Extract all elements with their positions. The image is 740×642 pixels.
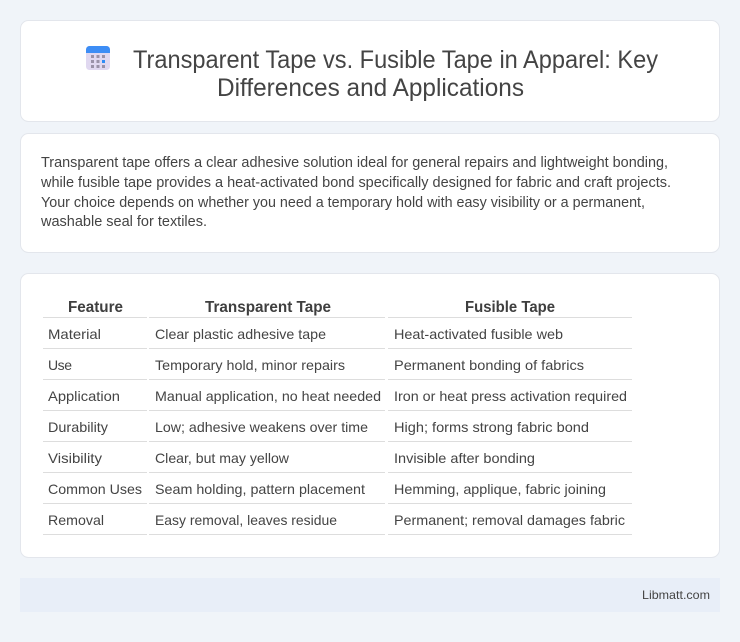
icon: calendar	[86, 46, 110, 70]
row: Use: Permanent bonding of fabrics	[394, 357, 584, 373]
row: Removal: Easy removal, leaves residue	[155, 512, 337, 528]
row: Use: Use	[48, 357, 72, 373]
row: Visibility	[43, 450, 632, 472]
text block: description	[40, 155, 671, 230]
table header: Transparent Tape	[205, 299, 331, 316]
heading: Differences and Applications	[217, 74, 524, 102]
row: Common Uses: Hemming, applique, fabric joining	[394, 481, 606, 497]
row: Material: Material	[48, 326, 101, 342]
row: Common Uses	[43, 481, 632, 504]
row: Application: Iron or heat press activation required	[394, 388, 627, 404]
row: Visibility: Invisible after bonding	[394, 450, 535, 466]
row: Use: Temporary hold, minor repairs	[155, 357, 345, 373]
row: Material: Heat-activated fusible web	[394, 326, 563, 342]
row: Common Uses: Seam holding, pattern placement	[155, 481, 365, 497]
row: Application: Manual application, no heat needed	[155, 388, 381, 404]
row: Durability: Durability	[48, 419, 108, 435]
row: Visibility: Visibility	[48, 450, 102, 466]
table header: Feature	[68, 299, 123, 316]
row: Removal: Permanent; removal damages fabric	[394, 512, 625, 528]
panel: title card	[20, 20, 720, 122]
table header	[43, 299, 632, 318]
footer: Libmatt.com	[642, 588, 710, 602]
row: Visibility: Clear, but may yellow	[155, 450, 290, 466]
footer	[20, 578, 720, 612]
heading: Transparent Tape vs. Fusible Tape in Apparel: Key	[133, 46, 658, 74]
row: Removal	[43, 512, 632, 534]
text block: description: Transparent tape offers a clear adhesive solution ideal for general repairs and lightweight bonding,	[41, 155, 668, 171]
row: Durability	[43, 419, 632, 442]
row: Durability: Low; adhesive weakens over time	[155, 419, 368, 435]
table header: Fusible Tape	[465, 299, 555, 316]
heading	[133, 46, 658, 102]
row: Use	[43, 357, 632, 380]
row: Durability: High; forms strong fabric bond	[394, 419, 589, 435]
text block: description: washable seal for textiles.	[40, 214, 207, 230]
row: Material: Clear plastic adhesive tape	[155, 326, 326, 342]
panel: description	[20, 134, 720, 252]
row: Removal: Removal	[48, 512, 104, 528]
row: Common Uses: Common Uses	[48, 481, 142, 497]
row: Application: Application	[48, 388, 120, 404]
text block: description: while fusible tape provides a heat-activated bond specifically designed for fabric and craft projects.	[40, 175, 671, 191]
panel: comparison table	[20, 274, 720, 558]
row: Application	[43, 388, 632, 410]
text block: description: Your choice depends on whether you need a temporary hold with easy visibility or a permanent,	[41, 195, 645, 211]
row: Material	[43, 326, 632, 348]
